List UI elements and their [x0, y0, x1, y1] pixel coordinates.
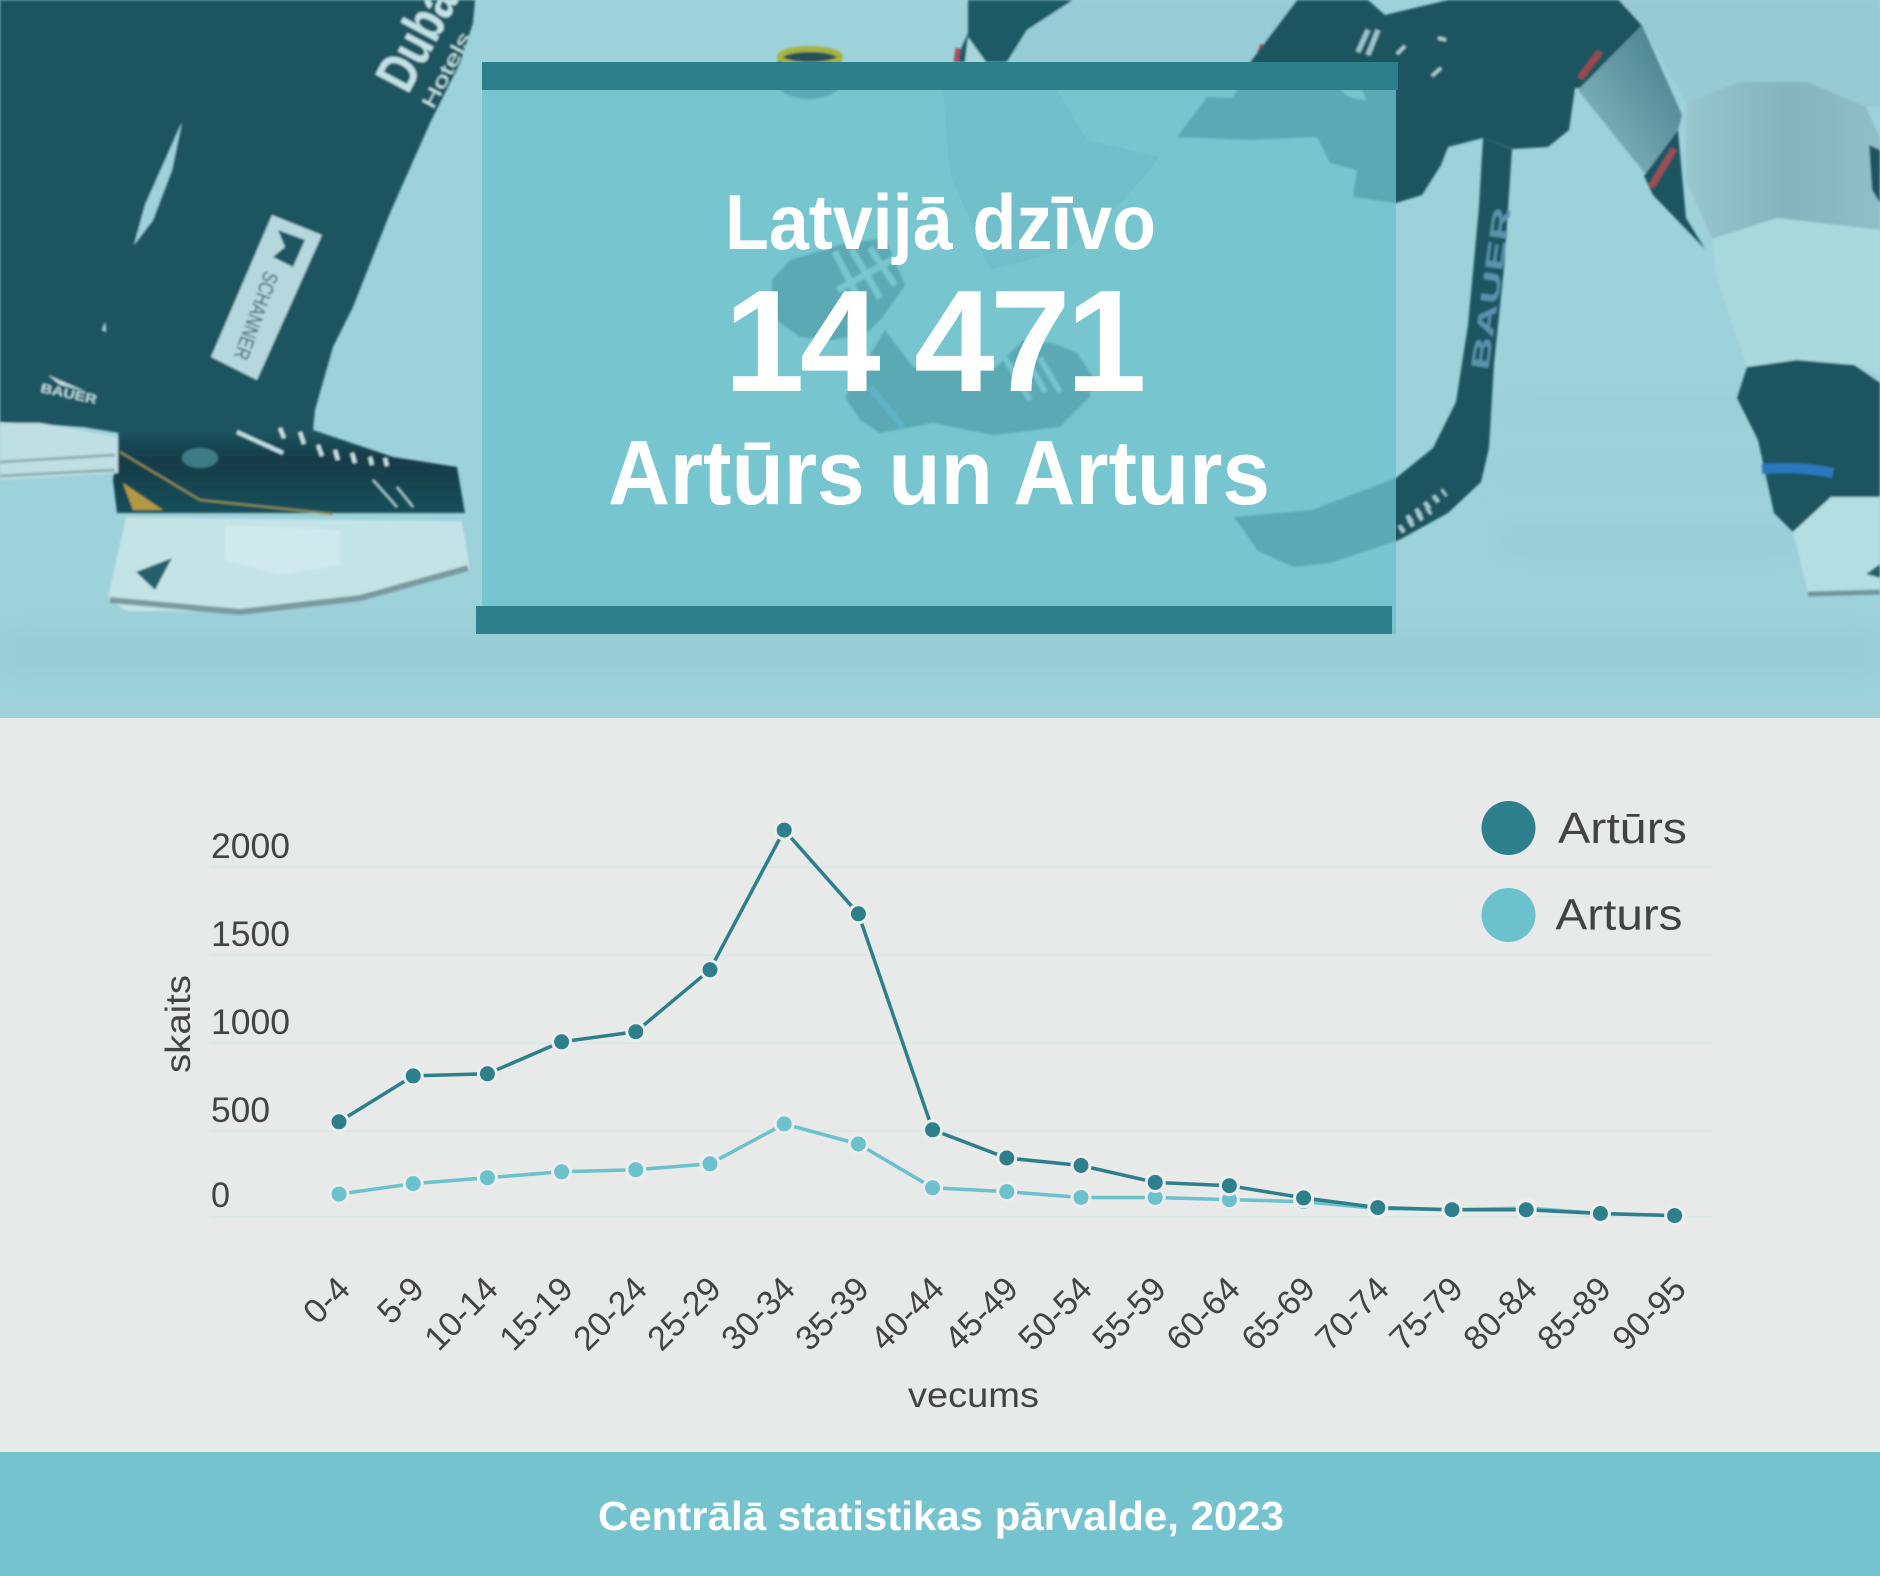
rear skate brand: BAUER	[39, 380, 99, 407]
x axis labels: 25-29	[640, 1270, 729, 1358]
centre player sleeve and pants	[1007, 0, 1297, 62]
x axis title: vecums	[908, 1376, 1039, 1415]
line chart	[159, 801, 1712, 1415]
arm guard	[1578, 25, 1682, 176]
shin pad	[1686, 82, 1880, 239]
y axis title: skaits	[159, 975, 198, 1073]
x axis labels: 45-49	[937, 1270, 1026, 1358]
title panel	[476, 62, 1398, 634]
x axis labels: 50-54	[1011, 1270, 1100, 1358]
legend: Artūrs	[1558, 804, 1687, 853]
centre skate	[772, 238, 905, 340]
heading: number: 14 471	[724, 260, 1147, 422]
grid lines and y axis labels: 500	[211, 1091, 270, 1130]
series: Arturs	[330, 1115, 1684, 1225]
x axis labels: 65-69	[1234, 1270, 1323, 1358]
x axis labels: 30-34	[714, 1270, 803, 1358]
right skate	[1737, 360, 1880, 532]
x axis labels: 55-59	[1085, 1270, 1174, 1358]
grid lines and y axis labels: 1500	[211, 915, 290, 954]
heading: line 1: Latvijā dzīvo	[725, 178, 1156, 266]
front blade guard	[108, 517, 470, 611]
hero photo: hockey players on ice: BAUER	[1466, 206, 1517, 372]
grid lines and y axis labels: 1000	[211, 1003, 290, 1042]
grid lines and y axis labels: 2000	[211, 827, 290, 866]
glove and sleeve	[1177, 0, 1642, 203]
referee leg and trousers	[0, 0, 475, 433]
x axis labels: 85-89	[1530, 1270, 1619, 1358]
sponsor patch: SCHANNER	[229, 268, 282, 363]
top bar	[482, 62, 1398, 90]
trouser logo: Hotels	[418, 29, 476, 112]
x axis labels: 60-64	[1159, 1270, 1248, 1358]
x axis labels: 10-14	[417, 1270, 506, 1358]
rear skate guard	[0, 423, 118, 480]
x axis labels	[296, 1270, 1694, 1358]
x axis labels: 80-84	[1456, 1270, 1545, 1358]
sponsor patch	[211, 215, 322, 380]
front skate boot	[113, 395, 465, 513]
x axis labels: 35-39	[788, 1270, 877, 1358]
series: Artūrs	[330, 821, 1684, 1225]
panel background	[482, 62, 1396, 634]
grid lines and y axis labels	[210, 827, 1712, 1217]
x axis labels: 5-9	[370, 1270, 432, 1331]
puck	[776, 60, 842, 100]
pants showing through panel	[943, 90, 1160, 270]
right player pants	[1618, 0, 1700, 96]
x axis labels: 70-74	[1308, 1270, 1397, 1358]
heading: names: Artūrs un Arturs	[608, 422, 1270, 524]
x axis labels: 20-24	[566, 1270, 655, 1358]
x axis labels: 15-19	[492, 1270, 581, 1358]
legend	[1482, 801, 1687, 942]
x axis labels: 90-95	[1605, 1270, 1694, 1358]
x axis labels: 75-79	[1382, 1270, 1471, 1358]
footer band	[0, 1452, 1880, 1576]
hockey stick	[1234, 138, 1512, 567]
x axis labels: 0-4	[296, 1270, 358, 1331]
x axis labels: 40-44	[863, 1270, 952, 1358]
sock	[1712, 218, 1880, 375]
legend: Arturs	[1556, 890, 1682, 940]
bottom bar	[476, 606, 1392, 634]
grid lines and y axis labels: 0	[211, 1176, 230, 1215]
hero photo: hockey players on ice	[0, 0, 1880, 718]
source text: Centrālā statistikas pārvalde, 2023	[598, 1493, 1284, 1539]
